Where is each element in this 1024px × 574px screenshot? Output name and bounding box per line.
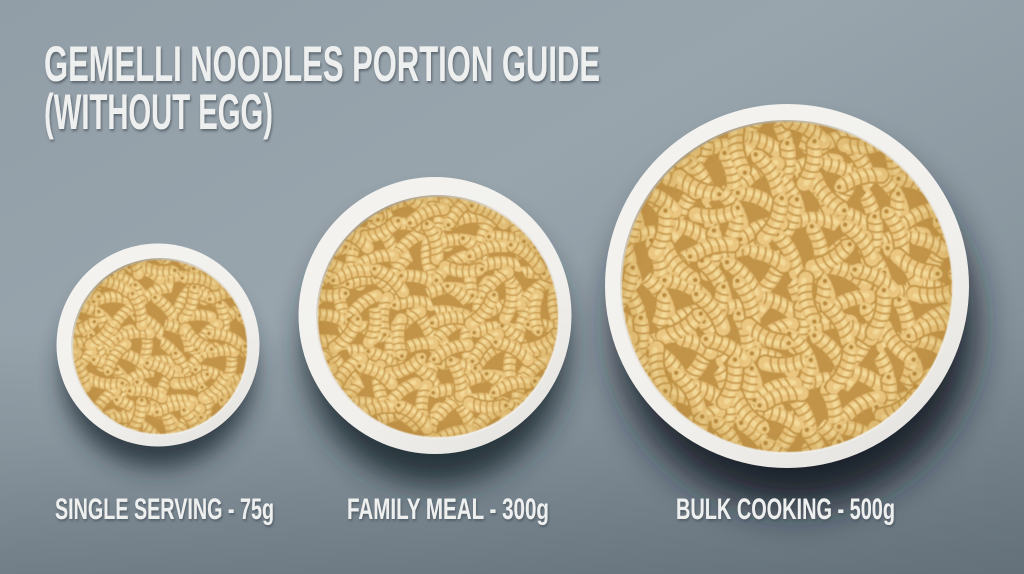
- bowl inside: single serving: [71, 258, 249, 436]
- bowl: bulk cooking: [605, 104, 975, 507]
- bowl shadow: bulk cooking: [615, 143, 975, 507]
- bowl rim: bulk cooking: [605, 104, 969, 468]
- bowl inside: family meal: [316, 195, 560, 439]
- bowl: family meal: [298, 177, 572, 485]
- title: GEMELLI NOODLES PORTION GUIDE: [44, 36, 600, 92]
- pasta: bulk cooking: [622, 122, 952, 452]
- label: bulk cooking: BULK COOKING - 500g: [676, 493, 895, 526]
- title: [44, 36, 600, 140]
- bowl rim: family meal: [298, 177, 572, 454]
- bowl: single serving: [56, 244, 260, 468]
- pasta: family meal: [318, 197, 558, 437]
- bowl rim: single serving: [56, 244, 260, 446]
- bowl shadow: family meal: [304, 205, 568, 485]
- label: single serving: SINGLE SERVING - 75g: [55, 493, 274, 526]
- bowl inside: bulk cooking: [620, 120, 954, 454]
- bowl shadow: single serving: [62, 272, 254, 468]
- pasta: single serving: [73, 260, 247, 434]
- title: (WITHOUT EGG): [44, 84, 273, 140]
- label: family meal: FAMILY MEAL - 300g: [347, 493, 549, 526]
